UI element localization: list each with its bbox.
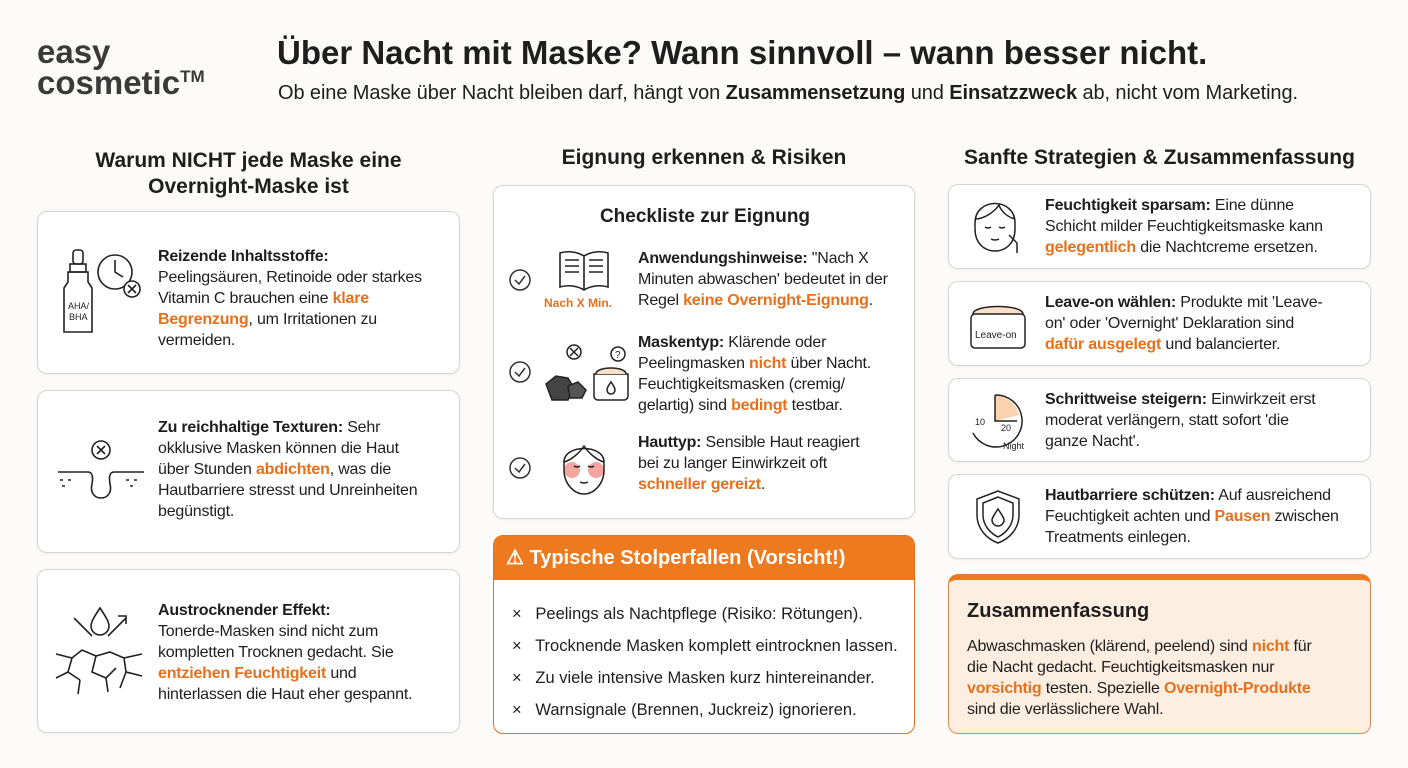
list: × Zu viele intensive Masken kurz hintereinander. [512,669,875,687]
text: Zu reichhaltige Texturen: Sehr [158,419,380,436]
icon: skin pore [58,440,144,499]
text: über Stunden abdichten, was die [158,461,391,478]
panel: reizende Inhaltsstoffe [37,211,460,374]
text: Vitamin C brauchen eine klare [158,290,369,307]
panel: feuchtigkeit sparsam [948,184,1371,269]
text: entziehen Feuchtigkeit und [158,665,356,682]
panel: leave-on: on' oder 'Overnight' Deklaration sind [1045,315,1294,332]
panel: zusammenfassung [948,574,1371,734]
panel: zusammenfassung: die Nacht gedacht. Feuchtigkeitsmasken nur [967,659,1274,676]
panel: leave-on [948,281,1371,366]
panel: schrittweise steigern [948,378,1371,462]
panel: hautbarriere schützen [948,474,1371,559]
panel: schrittweise steigern: 10 [975,417,985,427]
icon: dropper bottle and clock [63,249,141,333]
logo [37,33,205,101]
title: Über Nacht mit Maske? Wann sinnvoll – wann besser nicht. [277,34,1207,71]
item: maskentyp [509,334,871,414]
item: maskentyp: Peelingmasken nicht über Nacht. [638,355,871,372]
panel: feuchtigkeit sparsam: Schicht milder Feuchtigkeitsmaske kann [1045,218,1323,235]
text: Hautbarriere stresst und Unreinheiten [158,482,417,499]
panel: leave-on: Leave-on wählen: Produkte mit 'Leave- [1045,294,1323,311]
panel: zusammenfassung: vorsichtig testen. Spezielle Overnight-Produkte [967,680,1311,697]
text: vermeiden. [158,332,235,349]
heading: column 1: Overnight-Maske ist [148,175,349,198]
panel: hautbarriere schützen: Treatments einlegen. [1045,529,1191,546]
item: anwendungshinweise: Anwendungshinweise: "Nach X [638,250,869,267]
text [158,419,417,520]
icon: dropper bottle and clock: BHA [69,312,88,322]
item: anwendungshinweise: Regel keine Overnight-Eignung. [638,292,873,309]
text: Austrocknender Effekt: [158,602,331,619]
panel: schrittweise steigern: Schrittweise steigern: Einwirkzeit erst [1045,391,1316,408]
panel: feuchtigkeit sparsam: gelegentlich die Nachtcreme ersetzen. [1045,239,1318,256]
text: begünstigt. [158,503,234,520]
panel: leave-on: Leave-on [975,330,1017,341]
panel: schrittweise steigern: moderat verlängern, statt sofort 'die [1045,412,1289,429]
heading: column 3: Sanfte Strategien & Zusammenfassung [964,146,1355,169]
panel: reichhaltige Texturen [37,390,460,553]
text [158,602,412,703]
text: kompletten Trocknen gedacht. Sie [158,644,394,661]
subtitle: Ob eine Maske über Nacht bleiben darf, hängt von Zusammensetzung und Einsatzzweck ab, nicht vom Marketing. [278,82,1298,104]
panel: feuchtigkeit sparsam: Feuchtigkeit sparsam: Eine dünne [1045,197,1294,214]
item: maskentyp: ? [615,350,621,361]
heading: column 1: Warum NICHT jede Maske eine [95,149,402,172]
text [158,248,422,349]
item: hauttyp: bei zu langer Einwirkzeit oft [638,455,827,472]
text: Begrenzung, um Irritationen zu [158,311,377,328]
panel: schrittweise steigern: 20 [1001,423,1011,433]
item: hauttyp: Hauttyp: Sensible Haut reagiert [638,434,859,451]
panel: hautbarriere schützen: Hautbarriere schützen: Auf ausreichend [1045,487,1331,504]
list [512,605,898,719]
warning header: ⚠ Typische Stolperfallen (Vorsicht!) [506,547,845,569]
item: anwendungshinweise: Minuten abwaschen' bedeutet in der [638,271,888,288]
panel: schrittweise steigern: Night [1003,441,1025,451]
panel: schrittweise steigern: ganze Nacht'. [1045,433,1140,450]
list: × Peelings als Nachtpflege (Risiko: Rötungen). [512,605,863,623]
text: Peelingsäuren, Retinoide oder starkes [158,269,422,286]
heading: column 2: Eignung erkennen & Risiken [562,146,846,169]
logo: cosmeticTM [37,64,205,101]
heading: column 1 [95,149,402,198]
panel: leave-on: dafür ausgelegt und balancierter. [1045,336,1280,353]
item: maskentyp: Maskentyp: Klärende oder [638,334,826,351]
text: Reizende Inhaltsstoffe: [158,248,329,265]
text: okklusive Masken können die Haut [158,440,399,457]
item: anwendungshinweise [509,250,888,310]
item: hauttyp: schneller gereizt. [638,476,765,493]
checklist heading: Checkliste zur Eignung [600,206,810,227]
panel: zusammenfassung: Zusammenfassung [967,600,1149,622]
item: maskentyp: Feuchtigkeitsmasken (cremig/ [638,376,845,393]
panel: zusammenfassung: Abwaschmasken (klärend, peelend) sind nicht für [967,638,1312,655]
panel: typische Stolperfallen [493,535,915,734]
text: Tonerde-Masken sind nicht zum [158,623,378,640]
icon: dropper bottle and clock: AHA/ [68,301,90,311]
list: × Trocknende Masken komplett eintrocknen lassen. [512,637,898,655]
icon: cracked skin with drop [56,606,142,694]
warning header [494,536,914,580]
panel: austrocknender Effekt [37,569,460,733]
text: hinterlassen die Haut eher gespannt. [158,686,412,703]
panel: checklist [493,185,915,519]
panel: hautbarriere schützen: Feuchtigkeit achten und Pausen zwischen [1045,508,1339,525]
logo: easy [37,33,110,70]
item: hauttyp [509,434,860,495]
panel: zusammenfassung: sind die verlässlichere Wahl. [967,701,1163,718]
item: maskentyp: gelartig) sind bedingt testbar. [638,397,843,414]
item: anwendungshinweise: Nach X Min. [544,296,612,310]
list: × Warnsignale (Brennen, Juckreiz) ignorieren. [512,701,857,719]
